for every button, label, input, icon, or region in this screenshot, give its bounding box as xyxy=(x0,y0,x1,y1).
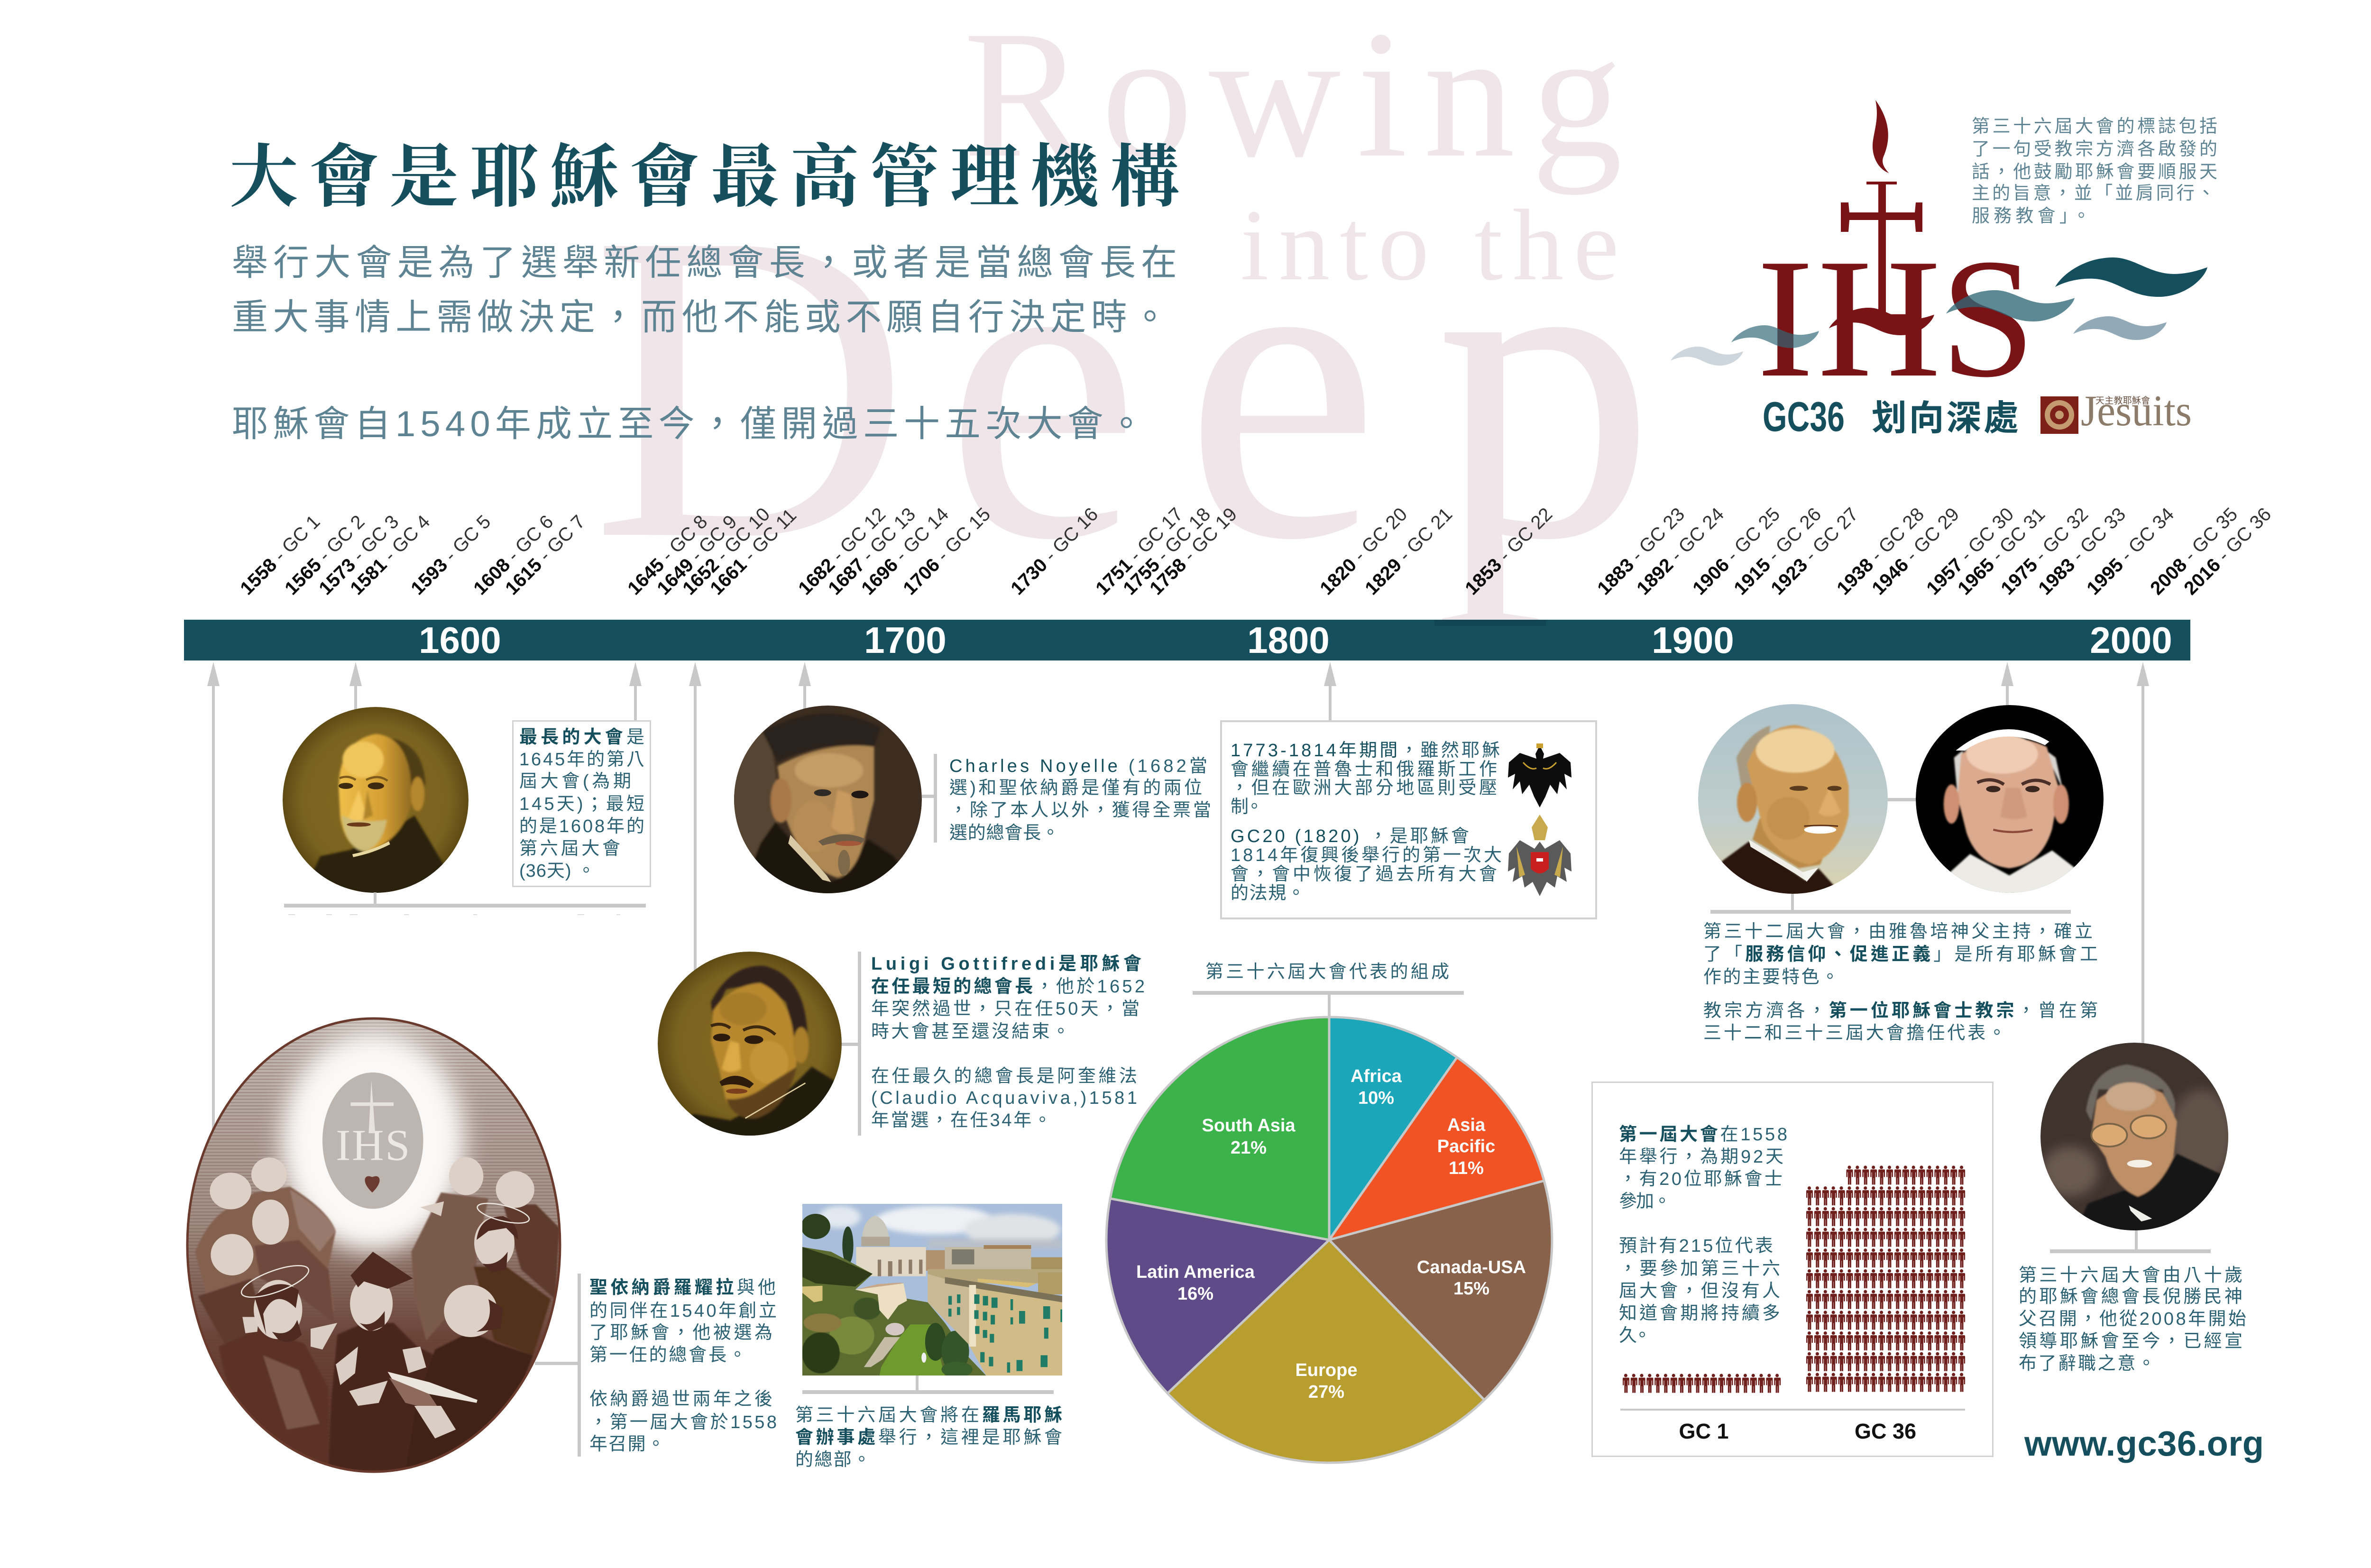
intro text: 舉行大會是為了選舉新任總會長，或者是當總會長在 xyxy=(232,243,1177,283)
timeline labels: 1853 - GC 22 xyxy=(1461,504,1556,599)
icon: flame xyxy=(1873,100,1889,173)
pictogram: GC 36, 215 people xyxy=(1805,1165,1966,1394)
pie labels: Europe xyxy=(1296,1360,1357,1380)
text box: longest congregation: 最長的大會是 xyxy=(519,727,644,747)
timeline labels: 1923 - GC 27 xyxy=(1767,504,1862,599)
text box: suppression and restoration: 1773-1814年期間，雖然耶穌 xyxy=(1231,741,1500,761)
timeline bar: 1700 xyxy=(864,619,947,661)
timeline labels: 1593 - GC 5 xyxy=(407,511,495,599)
timeline labels: 1682 - GC 12 xyxy=(794,504,890,599)
timeline labels: 1565 - GC 2 xyxy=(281,511,368,599)
timeline labels: 1915 - GC 26 xyxy=(1730,504,1825,599)
text box: suppression and restoration: 會繼續在普魯士和俄羅斯工作 xyxy=(1231,760,1497,779)
timeline bar: 1600 xyxy=(419,619,501,661)
connector under popes xyxy=(1710,798,2071,914)
timeline labels: 1975 - GC 32 xyxy=(1997,504,2092,599)
connector and text: Adolfo Nicolas: 父召開，他從2008年開始 xyxy=(2019,1309,2246,1329)
logo caption: GC36 划向深處 xyxy=(1763,393,2019,440)
text: attendance: ，有20位耶穌會士 xyxy=(1619,1169,1783,1189)
timeline labels: 1558 - GC 1 xyxy=(236,511,324,599)
text: GC32 and Pope Francis: 第三十二屆大會，由雅魯培神父主持，確立 xyxy=(1703,922,2093,942)
connector and text: St Ignatius: 聖依納爵羅耀拉與他 xyxy=(589,1278,776,1298)
timeline labels: 1649 - GC 9 xyxy=(653,511,741,599)
text box: longest congregation: 145天)；最短 xyxy=(519,794,644,814)
slice: Canada-USA xyxy=(1329,1181,1552,1400)
pie labels: Pacific xyxy=(1437,1137,1495,1156)
engraving: St Ignatius and companions xyxy=(187,1018,560,1472)
text box: suppression and restoration: 的法規。 xyxy=(1231,883,1305,903)
text: attendance: 預計有215位代表 xyxy=(1619,1236,1773,1256)
connector and text: Adolfo Nicolas xyxy=(2019,1230,2246,1374)
panel: GC1 vs GC36 attendance xyxy=(1592,1082,1993,1457)
text: attendance: 知道會期將持續多 xyxy=(1619,1303,1780,1323)
icon: red seal xyxy=(2040,396,2078,434)
text: attendance xyxy=(1619,1125,1787,1346)
connector and text: Adolfo Nicolas: 領導耶穌會至今，已經宣 xyxy=(2019,1331,2242,1351)
connector and text: Adolfo Nicolas: 的耶穌會總會長倪勝民神 xyxy=(2019,1287,2242,1307)
connector and text: Charles Noyelle: 選)和聖依納爵是僅有的兩位 xyxy=(949,778,1202,798)
timeline labels: 1983 - GC 33 xyxy=(2034,504,2130,599)
timeline labels: 1730 - GC 16 xyxy=(1007,504,1102,599)
text: attendance: 第一屆大會在1558 xyxy=(1619,1125,1787,1145)
intro text: 重大事情上需做決定，而他不能或不願自行決定時。 xyxy=(232,297,1168,338)
pictogram: GC 1, 20 people xyxy=(1622,1374,1781,1394)
timeline labels: 1696 - GC 14 xyxy=(857,504,953,599)
pie labels xyxy=(1136,1066,1526,1402)
pie chart xyxy=(1106,1017,1552,1463)
axis labels xyxy=(1679,1419,1916,1443)
timeline bar: 2000 xyxy=(2090,619,2172,661)
intro text: 耶穌會自1540年成立至今，僅開過三十五次大會。 xyxy=(232,404,1144,444)
connector and text: St Ignatius xyxy=(535,1274,777,1457)
logo caption: GC36 划向深處: GC36 xyxy=(1763,393,1845,440)
pie labels: 21% xyxy=(1231,1138,1267,1158)
connector and text: St Ignatius: 第一任的總會長。 xyxy=(589,1345,746,1365)
slice: Latin America xyxy=(1106,1199,1329,1393)
slice: Europe xyxy=(1167,1240,1484,1463)
arrows from timeline xyxy=(207,662,2149,1138)
pie labels: 15% xyxy=(1453,1279,1489,1299)
connector and text: Charles Noyelle xyxy=(922,754,1211,843)
connector under first portrait xyxy=(284,892,646,915)
timeline labels: 1751 - GC 17 xyxy=(1092,504,1187,599)
text box: longest congregation: 的是1608年的 xyxy=(519,816,644,836)
website url: www.gc36.org xyxy=(2024,1424,2264,1463)
axis labels: GC 36 xyxy=(1855,1419,1916,1443)
text box: suppression and restoration: ，但在歐洲大部分地區則受壓 xyxy=(1231,778,1497,798)
timeline labels: 1946 - GC 29 xyxy=(1868,504,1963,599)
text box: longest congregation: 第六屆大會 xyxy=(519,839,620,859)
portrait: Luigi Gottifredi xyxy=(658,952,846,1140)
connector and text: Adolfo Nicolas: 第三十六屆大會由八十歲 xyxy=(2019,1265,2242,1285)
text: GC32 and Pope Francis: 三十二和三十三屆大會擔任代表。 xyxy=(1703,1023,2006,1043)
waves xyxy=(1671,257,2207,366)
timeline labels: 1573 - GC 3 xyxy=(315,511,403,599)
pie labels: Latin America xyxy=(1136,1262,1255,1282)
text: attendance: 年舉行，為期92天 xyxy=(1619,1147,1783,1167)
connector and text: St Ignatius: ，第一屆大會於1558 xyxy=(589,1412,777,1432)
slice: Africa xyxy=(1329,1017,1457,1240)
timeline labels: 1758 - GC 19 xyxy=(1146,504,1241,599)
connector and text: Gottifredi: 年當選，在任34年。 xyxy=(871,1110,1051,1130)
portrait: Adolfo Nicolas xyxy=(2040,1043,2234,1236)
pie chart title: 第三十六屆大會代表的組成 xyxy=(1205,962,1449,982)
text box: longest congregation xyxy=(513,721,651,887)
background watermark: Rowing into the Deep: into the xyxy=(1241,188,1629,302)
text: GC32 and Pope Francis: 作的主要特色。 xyxy=(1703,967,1839,987)
pie labels: South Asia xyxy=(1202,1116,1296,1136)
connector and text: Gottifredi: 時大會甚至還沒結束。 xyxy=(871,1022,1070,1042)
connector and text: St Ignatius: 年召開。 xyxy=(589,1434,665,1454)
portrait: Pedro Arrupe xyxy=(1698,704,1888,900)
timeline bar: 1800 xyxy=(1247,619,1330,661)
connector and text: Gottifredi: (Claudio Acquaviva,)1581 xyxy=(871,1088,1137,1108)
engraving: St Ignatius and companions: IHS xyxy=(336,1120,410,1170)
pie labels: 10% xyxy=(1358,1088,1394,1108)
connector and text: St Ignatius: 依納爵過世兩年之後 xyxy=(589,1389,772,1409)
connector and text: Adolfo Nicolas: 布了辭職之意。 xyxy=(2019,1354,2155,1374)
pie labels: Asia xyxy=(1447,1115,1486,1135)
text: attendance: 參加。 xyxy=(1619,1192,1671,1211)
timeline labels: 1995 - GC 34 xyxy=(2083,504,2178,599)
text box: longest congregation: (36天) 。 xyxy=(519,861,595,881)
logo description: 第三十六屆大會的標誌包括 xyxy=(1972,117,2217,137)
pie labels: 16% xyxy=(1177,1284,1213,1304)
portrait: Charles Noyelle xyxy=(726,706,928,899)
connector and text: Curia: 的總部。 xyxy=(795,1450,871,1470)
logo description: 主的旨意，並「並肩同行、 xyxy=(1972,183,2215,203)
timeline labels: 1938 - GC 28 xyxy=(1833,504,1928,599)
connector and text: Charles Noyelle: Charles Noyelle (1682當 xyxy=(949,756,1207,776)
connector and text: Gottifredi: 年突然過世，只在任50天，當 xyxy=(871,999,1140,1019)
axis labels: GC 1 xyxy=(1679,1419,1729,1443)
timeline labels: 1965 - GC 31 xyxy=(1954,504,2049,599)
text box: suppression and restoration: 1814年復興後舉行的第一次大 xyxy=(1231,845,1502,865)
timeline labels: 2008 - GC 35 xyxy=(2146,504,2242,599)
logo: Jesuits: 天主教耶穌會 xyxy=(2095,395,2150,406)
icon: cross xyxy=(1841,182,1922,313)
logo: Jesuits: Jesuits xyxy=(2081,386,2192,435)
icon: Austrian eagle xyxy=(1508,815,1571,896)
connector and text: Gottifredi: Luigi Gottifredi是耶穌會 xyxy=(871,954,1141,974)
logo: IHS with cross, flame and waves xyxy=(1671,100,2207,413)
text box: suppression and restoration: 會，會中恢復了過去所有大會 xyxy=(1231,864,1497,884)
connector and text: St Ignatius: 了耶穌會，他被選為 xyxy=(589,1323,772,1343)
text box: suppression and restoration: 制。 xyxy=(1231,797,1263,817)
timeline labels xyxy=(236,504,2275,599)
connector and text: Curia: 第三十六屆大會將在羅馬耶穌 xyxy=(795,1405,1062,1425)
text: GC32 and Pope Francis xyxy=(1703,922,2098,1043)
timeline labels: 1615 - GC 7 xyxy=(501,511,589,599)
icon: Prussian eagle xyxy=(1508,743,1571,807)
slice: Asia Pacific xyxy=(1329,1057,1544,1240)
intro text xyxy=(232,243,1177,444)
connector and text: St Ignatius: 的同伴在1540年創立 xyxy=(589,1301,777,1321)
background watermark: Rowing into the Deep: Deep xyxy=(591,142,1655,631)
timeline labels: 1755 - GC 18 xyxy=(1119,504,1214,599)
portrait: Diego Lainez xyxy=(283,707,469,899)
logo caption: GC36 划向深處: 划向深處 xyxy=(1872,398,2019,438)
timeline labels: 1820 - GC 20 xyxy=(1316,504,1411,599)
timeline labels: 1706 - GC 15 xyxy=(899,504,994,599)
timeline labels: 1687 - GC 13 xyxy=(824,504,919,599)
slice: South Asia xyxy=(1110,1017,1329,1240)
text: attendance: 屆大會，但沒有人 xyxy=(1619,1281,1780,1301)
timeline labels: 1906 - GC 25 xyxy=(1689,504,1784,599)
logo description xyxy=(1972,117,2217,226)
timeline bar xyxy=(184,619,2190,661)
text: GC32 and Pope Francis: 教宗方濟各，第一位耶穌會士教宗，曾在第 xyxy=(1703,1001,2098,1021)
timeline labels: 1829 - GC 21 xyxy=(1361,504,1456,599)
connector and text: Charles Noyelle: 選的總會長。 xyxy=(949,823,1059,843)
title: 大會是耶穌會最高管理機構 xyxy=(230,122,1179,220)
timeline labels: 1661 - GC 11 xyxy=(706,505,800,599)
connector and text: Charles Noyelle: ，除了本人以外，獲得全票當 xyxy=(949,800,1211,820)
connector and text: Curia: 會辦事處舉行，這裡是耶穌會 xyxy=(795,1428,1062,1448)
pie labels: 27% xyxy=(1308,1382,1344,1402)
connector and text: Curia xyxy=(795,1375,1062,1470)
logo description: 服務教會」。 xyxy=(1972,206,2090,226)
pie labels: Africa xyxy=(1351,1066,1402,1086)
timeline labels: 2016 - GC 36 xyxy=(2180,504,2275,599)
timeline labels: 1892 - GC 24 xyxy=(1633,504,1728,599)
pie labels: 11% xyxy=(1449,1158,1484,1178)
portrait: Pope Francis xyxy=(1916,705,2104,900)
timeline labels: 1652 - GC 10 xyxy=(679,504,774,599)
connector and text: Gottifredi: 在任最短的總會長，他於1652 xyxy=(871,977,1145,997)
connector and text: Gottifredi: 在任最久的總會長是阿奎維法 xyxy=(871,1066,1137,1086)
timeline labels: 1581 - GC 4 xyxy=(346,511,434,599)
pie chart title xyxy=(1193,962,1464,1017)
text box: longest congregation: 屆大會(為期 xyxy=(519,771,631,791)
text box: longest congregation: 1645年的第八 xyxy=(519,750,644,770)
timeline labels: 1883 - GC 23 xyxy=(1593,504,1689,599)
text: attendance: ，要參加第三十六 xyxy=(1619,1259,1780,1279)
timeline bar: 1900 xyxy=(1652,619,1734,661)
timeline labels: 1645 - GC 8 xyxy=(624,511,711,599)
logo description: 了一句受教宗方濟各啟發的 xyxy=(1972,139,2217,159)
timeline labels: 1608 - GC 6 xyxy=(469,511,557,599)
text box: suppression and restoration: GC20 (1820) ，是耶穌會 xyxy=(1231,826,1469,846)
pie labels: Canada-USA xyxy=(1417,1257,1526,1277)
photo: Jesuit Curia in Rome xyxy=(801,1204,1062,1377)
logo description: 話，他鼓勵耶穌會要順服天 xyxy=(1972,162,2217,182)
text: attendance: 久。 xyxy=(1619,1326,1651,1346)
text: GC32 and Pope Francis: 了「服務信仰、促進正義」是所有耶穌會工 xyxy=(1703,944,2098,964)
IHS letters: IHS xyxy=(1757,223,2035,413)
text box: suppression and restoration xyxy=(1221,721,1596,918)
connector and text: Gottifredi xyxy=(842,952,1145,1136)
timeline labels: 1957 - GC 30 xyxy=(1922,504,2018,599)
